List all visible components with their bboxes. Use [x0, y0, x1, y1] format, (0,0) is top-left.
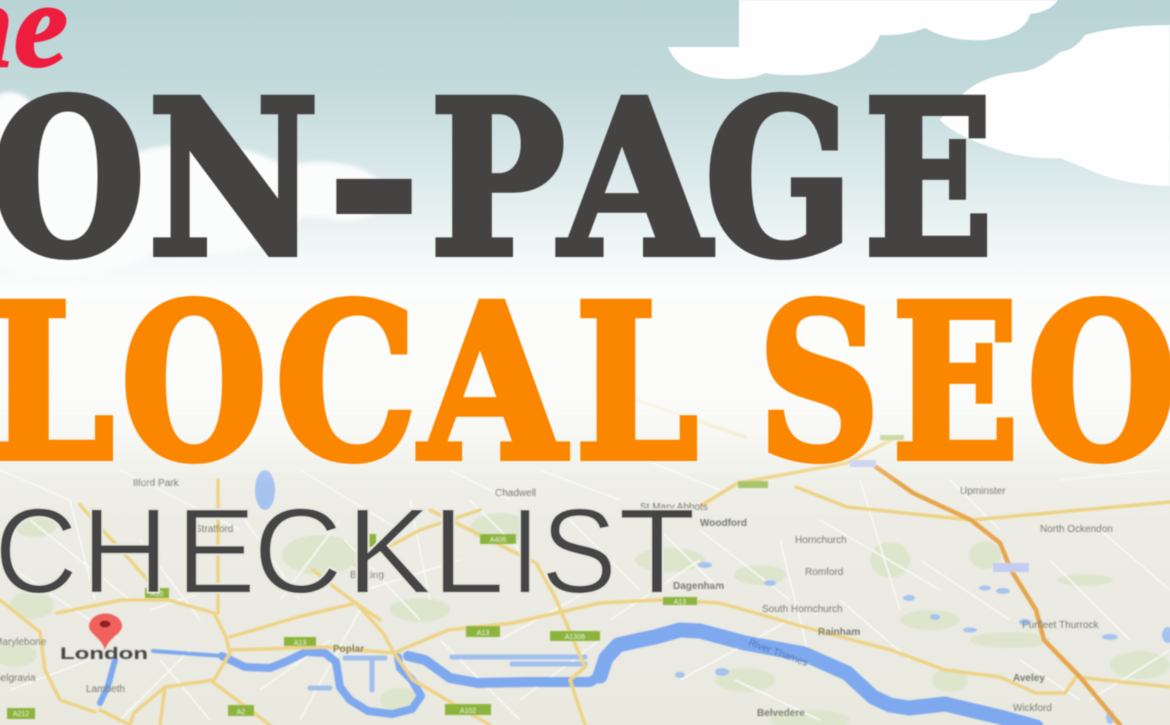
heading: CHECKLIST: E	[176, 483, 256, 619]
place labels: Purfleet Thurrock	[1022, 620, 1100, 631]
road number shields: A1306	[565, 634, 585, 641]
place labels: Ilford Park	[133, 478, 180, 489]
heading: CHECKLIST: I	[510, 483, 540, 619]
place labels: Barking	[350, 570, 384, 581]
place labels: Woodford	[700, 518, 747, 529]
road number shields: A406	[490, 537, 506, 544]
place labels	[0, 452, 1113, 719]
motorway junction labels	[850, 460, 1029, 572]
cloud: top centre	[668, 0, 1058, 79]
heading: ON-PAGE: -	[328, 54, 420, 304]
map	[0, 400, 1170, 725]
heading: LOCAL SEO: L	[575, 258, 698, 508]
heading: ON-PAGE: N	[148, 54, 319, 304]
place labels: Hornchurch	[795, 535, 847, 546]
M25 motorway	[876, 467, 1120, 725]
place labels: North Ockendon	[1040, 524, 1113, 535]
heading: ON-PAGE: P	[430, 54, 565, 304]
place labels: Rainham	[818, 627, 860, 638]
road number shields: A13	[674, 599, 686, 606]
place labels: Aveley	[1013, 673, 1045, 684]
place labels: Lambeth	[86, 684, 125, 695]
heading: CHECKLIST: L	[431, 483, 505, 619]
place labels: Poplar	[333, 644, 364, 655]
place labels: Upminster	[960, 486, 1006, 497]
cloud: behind heading left	[0, 92, 387, 277]
River Thames label: River Thames	[747, 637, 809, 669]
place labels: Romford	[805, 567, 843, 578]
map parks	[0, 513, 1170, 725]
road number shields: A2	[237, 709, 245, 716]
heading: LOCAL SEO: A	[418, 258, 567, 508]
River Thames	[100, 630, 1036, 725]
heading: ON-PAGE: A	[558, 54, 712, 304]
place labels: Noak Hill	[648, 452, 688, 463]
road number shields: A13	[294, 640, 306, 647]
place labels: St Mary Abbots	[640, 502, 708, 513]
cloud: top right	[940, 25, 1170, 186]
heading: LOCAL SEO: E	[892, 258, 1019, 508]
icon: map pin	[89, 614, 122, 650]
clouds	[0, 0, 1170, 277]
road number shields: A212	[13, 711, 29, 718]
road number shields: A10	[151, 591, 163, 598]
heading: ON-PAGE	[0, 54, 993, 304]
road number shields: A13	[477, 630, 489, 637]
heading: LOCAL SEO	[0, 258, 1170, 508]
heading: LOCAL SEO: O	[121, 258, 267, 508]
place labels: Dagenham	[673, 581, 724, 592]
heading: CHECKLIST: K	[346, 483, 432, 619]
road number shields: A102	[460, 708, 476, 715]
fade of map into sky	[0, 300, 1170, 485]
place labels: Stratford	[195, 524, 233, 535]
lakes and reservoirs	[255, 470, 1170, 724]
place labels: Belvedere	[757, 708, 805, 719]
place labels: Wickford	[1013, 703, 1052, 714]
major roads	[0, 400, 1170, 725]
heading: LOCAL SEO: C	[275, 258, 417, 508]
heading: CHECKLIST	[0, 483, 696, 619]
heading: CHECKLIST: S	[541, 483, 617, 619]
road number shields	[7, 435, 904, 719]
heading: LOCAL SEO: S	[758, 258, 880, 508]
heading: CHECKLIST: T	[618, 483, 696, 619]
minor streets	[0, 450, 1170, 720]
place labels: Chadwell	[495, 488, 536, 499]
heading: CHECKLIST: C	[253, 483, 343, 619]
label: London: London	[60, 644, 148, 663]
heading: CHECKLIST: H	[81, 483, 169, 619]
place labels: South Hornchurch	[762, 604, 843, 615]
heading: ON-PAGE: E	[864, 54, 993, 304]
heading: ON-PAGE: G	[705, 54, 853, 304]
